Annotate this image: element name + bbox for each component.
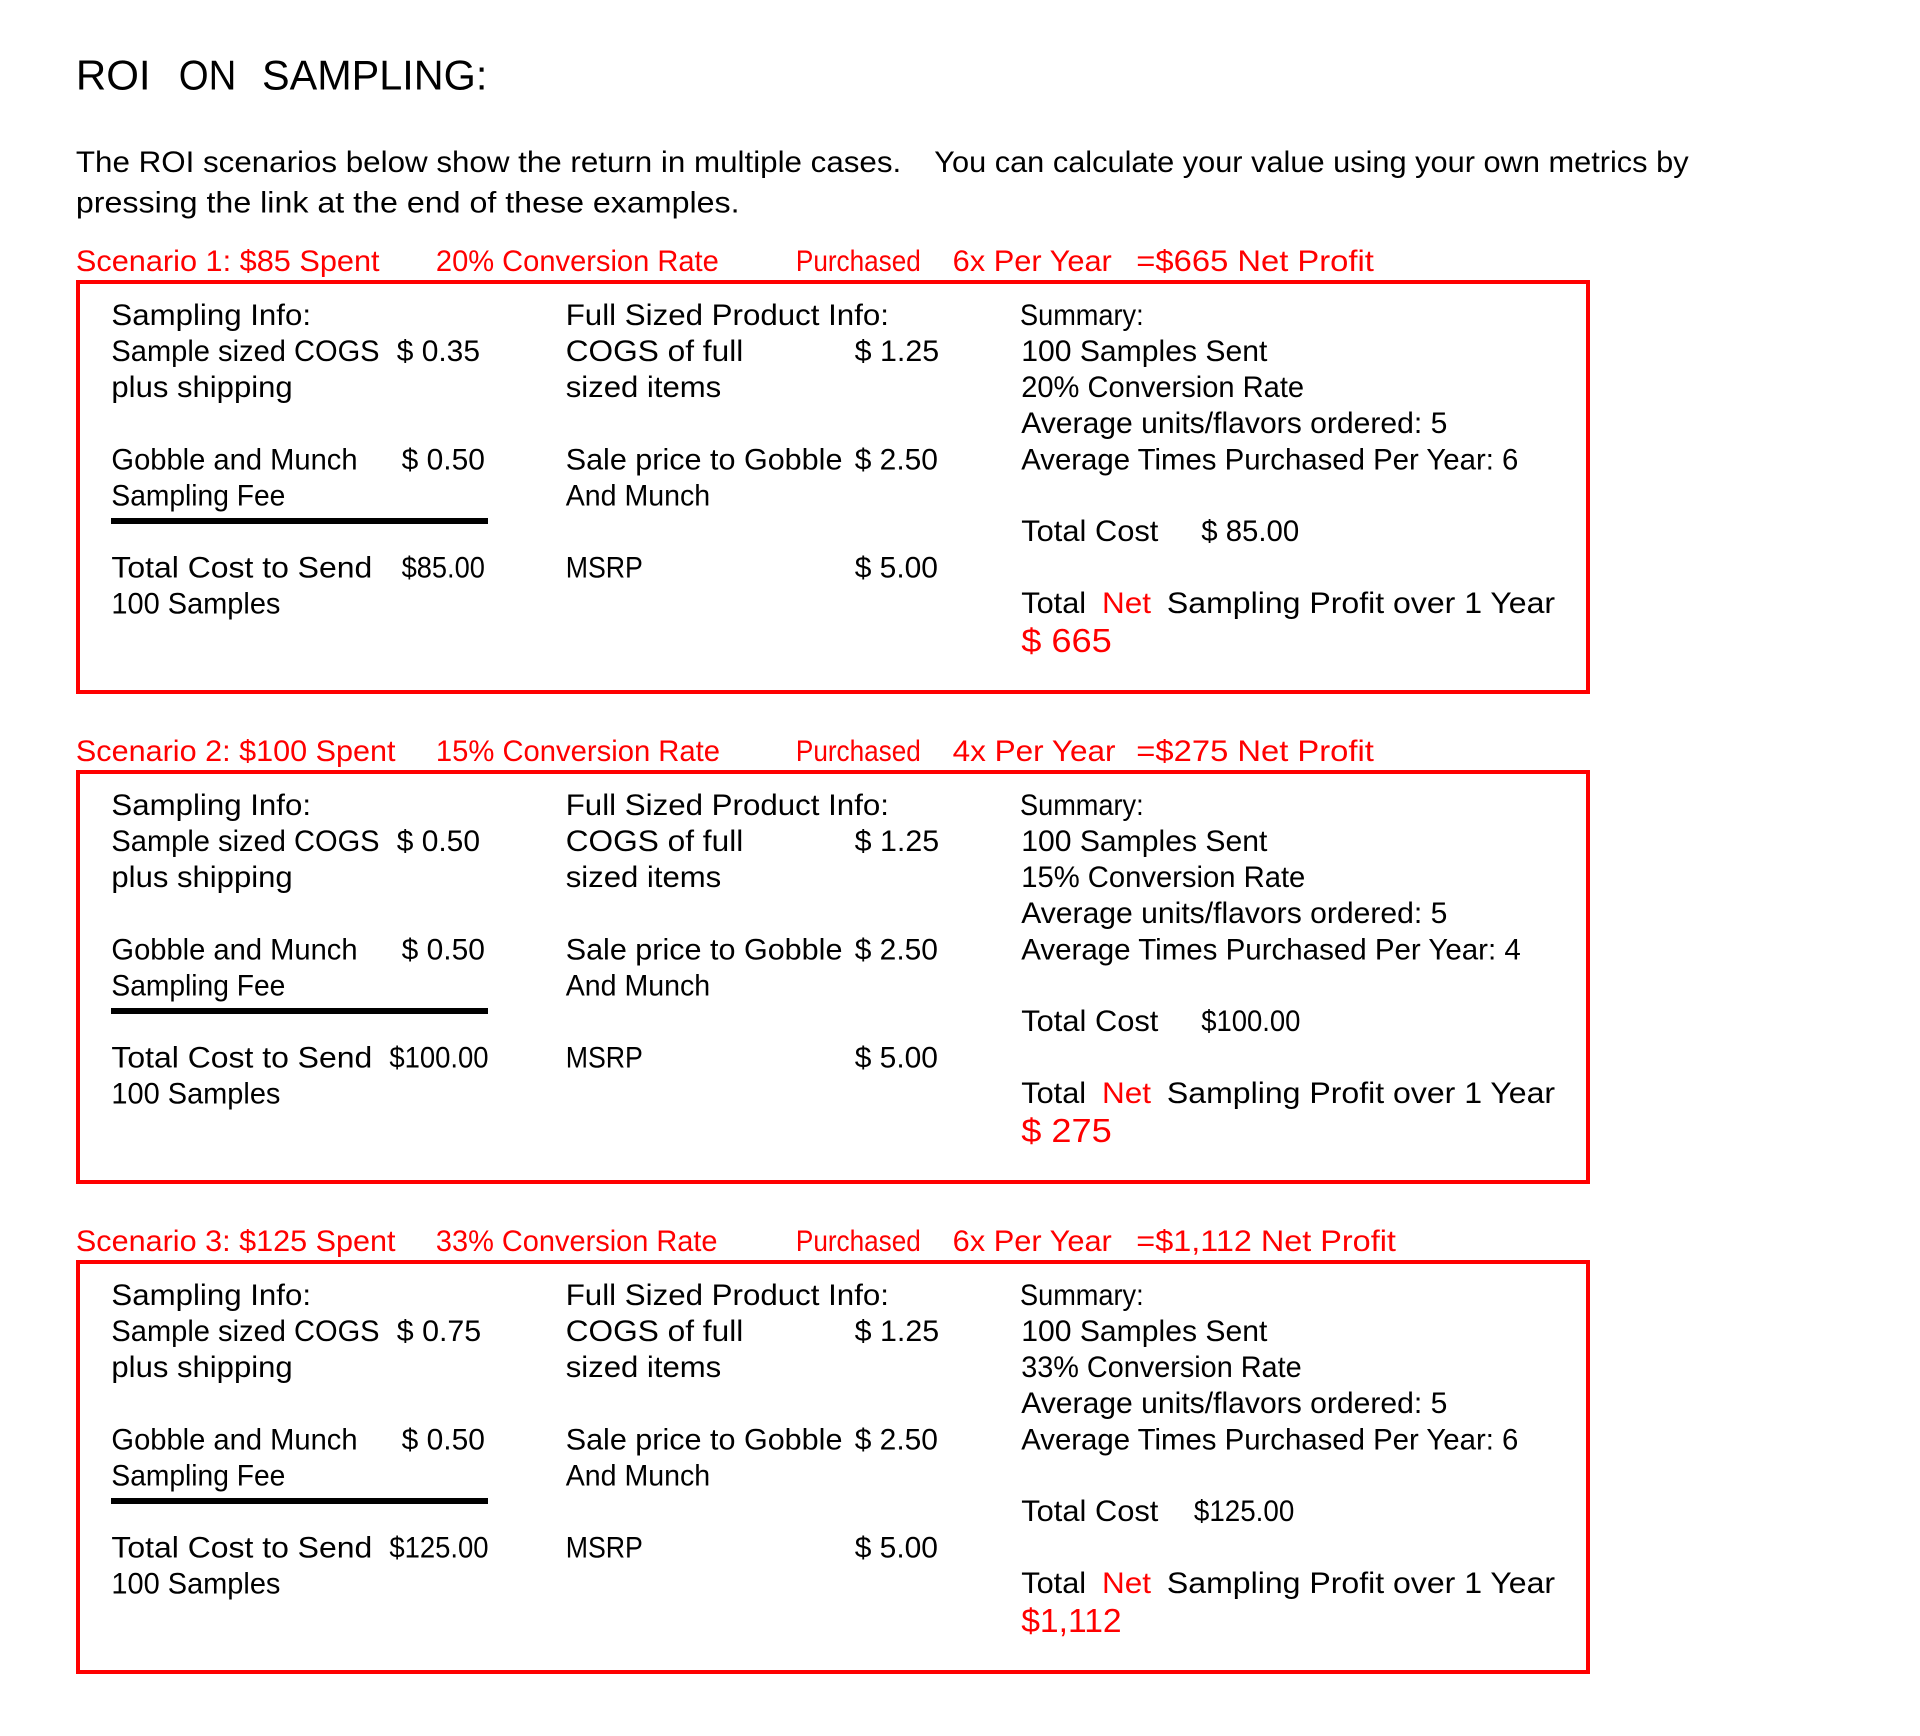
column: summary 2: 15% Conversion Rate (1021, 861, 1305, 894)
column: sampling info 3: Sample sized COGS (111, 1315, 380, 1348)
column: sampling info 1: plus shipping (111, 371, 293, 404)
heading: scenario 2 (76, 735, 1375, 768)
column: full sized product info 3: Full Sized Product Info: (566, 1279, 889, 1312)
column: summary 2: Average Times Purchased Per Year: 4 (1021, 933, 1521, 966)
column: sampling info 1: Total Cost to Send (111, 551, 372, 584)
column: full sized product info 2: COGS of full (566, 825, 743, 858)
column: summary 1: Average units/flavors ordered: 5 (1021, 407, 1447, 440)
column: sampling info 2: plus shipping (111, 861, 293, 894)
panel: scenario 2 (78, 772, 1588, 1182)
column: summary 2: Total Cost (1021, 1005, 1159, 1038)
column: full sized product info 1: $ 5.00 (855, 551, 938, 584)
column: summary 2: Summary: (1020, 789, 1144, 822)
column: full sized product info 3: Sale price to Gobble (566, 1423, 842, 1456)
column: sampling info 3: Total Cost to Send (111, 1531, 372, 1564)
column: sampling info 2: Sampling Fee (111, 969, 285, 1002)
column: full sized product info 3: And Munch (566, 1459, 710, 1492)
column: summary 3: 100 Samples Sent (1021, 1315, 1268, 1348)
divider rule: scenario 2 sampling total (111, 1008, 488, 1014)
column: summary 2: $ 275 (1021, 1113, 1112, 1150)
intro paragraph (76, 146, 1689, 220)
column: summary 3: Average units/flavors ordered: 5 (1021, 1387, 1447, 1420)
column: sampling info 1: 100 Samples (111, 587, 280, 620)
column: sampling info 3: $ 0.50 (402, 1423, 485, 1456)
column: full sized product info 1: MSRP (566, 551, 643, 584)
title: ROI (76, 51, 151, 98)
column: sampling info 1: Sampling Fee (111, 479, 285, 512)
column: sampling info 3: Gobble and Munch (111, 1423, 358, 1456)
column: sampling info 3 (111, 1279, 489, 1600)
heading: scenario 3: Scenario 3: $125 Spent (76, 1225, 396, 1258)
column: summary 1: Sampling Profit over 1 Year (1167, 587, 1555, 620)
column: summary 3 (1020, 1279, 1555, 1640)
column: full sized product info 2: Sale price to Gobble (566, 933, 842, 966)
column: summary 1: 20% Conversion Rate (1021, 371, 1304, 404)
column: summary 3: Sampling Profit over 1 Year (1167, 1567, 1555, 1600)
column: sampling info 2: Sampling Info: (111, 789, 311, 822)
intro paragraph: The ROI scenarios below show the return in multiple cases. (76, 146, 901, 179)
column: full sized product info 2: sized items (566, 861, 721, 894)
column: sampling info 2: $ 0.50 (397, 825, 480, 858)
column: sampling info 1: $85.00 (402, 551, 485, 584)
heading: scenario 2: Purchased (796, 735, 921, 768)
heading: scenario 2: =$275 Net Profit (1136, 735, 1375, 768)
title: ON (179, 51, 236, 98)
column: full sized product info 1: $ 1.25 (855, 335, 939, 368)
column: summary 1: Total (1021, 587, 1086, 620)
column: full sized product info 1: And Munch (566, 479, 710, 512)
column: sampling info 1 (111, 299, 485, 620)
column: summary 3: 33% Conversion Rate (1021, 1351, 1302, 1384)
column: full sized product info 1 (566, 299, 939, 584)
column: sampling info 2: Sample sized COGS (111, 825, 380, 858)
column: sampling info 1: Sample sized COGS (111, 335, 380, 368)
column: summary 1: Summary: (1020, 299, 1144, 332)
column: sampling info 3: $ 0.75 (397, 1315, 481, 1348)
column: summary 1: Net (1102, 587, 1152, 620)
column: summary 2 (1020, 789, 1555, 1150)
column: sampling info 3: $125.00 (389, 1531, 489, 1564)
divider rule: scenario 1 sampling total (111, 518, 488, 524)
column: full sized product info 2: $ 1.25 (855, 825, 939, 858)
column: summary 3: Total (1021, 1567, 1086, 1600)
title (76, 51, 487, 98)
column: sampling info 1: Gobble and Munch (111, 443, 358, 476)
column: summary 1: $ 665 (1021, 623, 1112, 660)
column: sampling info 2: $100.00 (389, 1041, 489, 1074)
heading: scenario 2: Scenario 2: $100 Spent (76, 735, 396, 768)
column: sampling info 3: plus shipping (111, 1351, 293, 1384)
column: full sized product info 3: $ 2.50 (855, 1423, 938, 1456)
heading: scenario 3: 6x Per Year (953, 1225, 1112, 1258)
column: full sized product info 2 (566, 789, 939, 1074)
column: full sized product info 1: Sale price to Gobble (566, 443, 842, 476)
column: full sized product info 1: $ 2.50 (855, 443, 938, 476)
column: full sized product info 2: $ 5.00 (855, 1041, 938, 1074)
column: full sized product info 2: $ 2.50 (855, 933, 938, 966)
column: summary 1 (1020, 299, 1555, 660)
column: full sized product info 3: $ 5.00 (855, 1531, 938, 1564)
intro paragraph: pressing the link at the end of these examples. (76, 187, 740, 220)
column: full sized product info 2: And Munch (566, 969, 710, 1002)
column: sampling info 2: 100 Samples (111, 1077, 280, 1110)
heading: scenario 3: 33% Conversion Rate (436, 1225, 718, 1258)
column: summary 3: Total Cost (1021, 1495, 1159, 1528)
column: sampling info 1: Sampling Info: (111, 299, 311, 332)
column: full sized product info 2: Full Sized Product Info: (566, 789, 889, 822)
column: summary 1: Average Times Purchased Per Year: 6 (1021, 443, 1518, 476)
heading: scenario 1: 20% Conversion Rate (436, 245, 719, 278)
column: full sized product info 3: MSRP (566, 1531, 643, 1564)
heading: scenario 2: 15% Conversion Rate (436, 735, 720, 768)
column: summary 2: Average units/flavors ordered: 5 (1021, 897, 1447, 930)
column: summary 2: Total (1021, 1077, 1086, 1110)
heading: scenario 1: =$665 Net Profit (1136, 245, 1375, 278)
column: summary 3: $1,112 (1021, 1603, 1122, 1640)
column: full sized product info 2: MSRP (566, 1041, 643, 1074)
column: sampling info 1: $ 0.50 (402, 443, 485, 476)
intro paragraph: You can calculate your value using your own metrics by (934, 146, 1689, 179)
column: full sized product info 1: Full Sized Product Info: (566, 299, 889, 332)
heading: scenario 1 (76, 245, 1375, 278)
heading: scenario 1: Purchased (796, 245, 921, 278)
heading: scenario 2: 4x Per Year (953, 735, 1116, 768)
panel: scenario 3 (78, 1262, 1588, 1672)
column: full sized product info 3: sized items (566, 1351, 721, 1384)
column: sampling info 3: Sampling Info: (111, 1279, 311, 1312)
heading: scenario 3 (76, 1225, 1397, 1258)
column: sampling info 3: 100 Samples (111, 1567, 280, 1600)
column: sampling info 2: $ 0.50 (402, 933, 485, 966)
heading: scenario 1: 6x Per Year (953, 245, 1112, 278)
column: summary 3: Net (1102, 1567, 1152, 1600)
column: sampling info 2 (111, 789, 489, 1110)
column: full sized product info 3 (566, 1279, 939, 1564)
column: summary 1: Total Cost (1021, 515, 1159, 548)
heading: scenario 1: Scenario 1: $85 Spent (76, 245, 380, 278)
column: sampling info 1: $ 0.35 (397, 335, 480, 368)
panel: scenario 1 (78, 282, 1588, 692)
column: summary 2: $100.00 (1201, 1005, 1300, 1038)
column: sampling info 2: Total Cost to Send (111, 1041, 372, 1074)
column: full sized product info 1: sized items (566, 371, 721, 404)
column: full sized product info 1: COGS of full (566, 335, 743, 368)
divider rule: scenario 3 sampling total (111, 1498, 488, 1504)
title: SAMPLING: (262, 51, 487, 98)
column: summary 2: 100 Samples Sent (1021, 825, 1268, 858)
column: sampling info 2: Gobble and Munch (111, 933, 358, 966)
column: summary 3: Average Times Purchased Per Year: 6 (1021, 1423, 1518, 1456)
column: summary 3: Summary: (1020, 1279, 1144, 1312)
column: sampling info 3: Sampling Fee (111, 1459, 285, 1492)
column: summary 1: 100 Samples Sent (1021, 335, 1268, 368)
column: summary 2: Net (1102, 1077, 1152, 1110)
heading: scenario 3: Purchased (796, 1225, 921, 1258)
column: summary 1: $ 85.00 (1201, 515, 1299, 548)
column: summary 3: $125.00 (1194, 1495, 1294, 1528)
column: full sized product info 3: COGS of full (566, 1315, 743, 1348)
heading: scenario 3: =$1,112 Net Profit (1136, 1225, 1397, 1258)
column: full sized product info 3: $ 1.25 (855, 1315, 939, 1348)
column: summary 2: Sampling Profit over 1 Year (1167, 1077, 1555, 1110)
